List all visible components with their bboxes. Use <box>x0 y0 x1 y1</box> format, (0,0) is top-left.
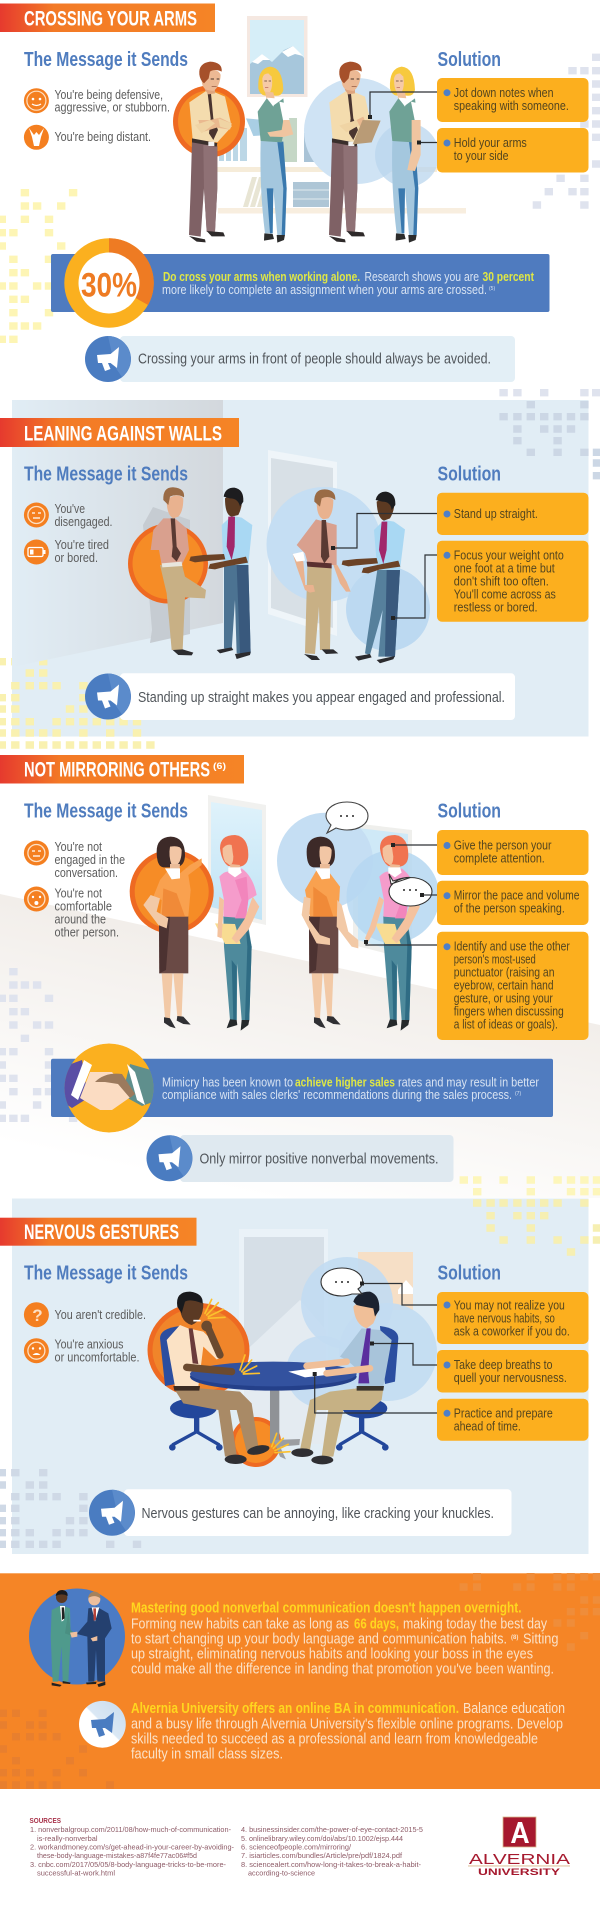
closing paragraph 2: Balance education <box>463 1700 565 1717</box>
closing paragraph 2: faculty in small class sizes. <box>131 1746 283 1763</box>
logo: Alvernia University <box>468 1817 570 1877</box>
solution box: attention <box>437 830 588 875</box>
banner heading <box>0 1218 196 1246</box>
banner heading: LEANING AGAINST WALLS <box>24 423 222 446</box>
banner heading <box>0 755 244 784</box>
arms and paper <box>187 1321 370 1377</box>
callout: mimicry: compliance with sales clerks' recommendations during the sales process. <box>162 1088 512 1102</box>
sources column 2 <box>241 1825 423 1878</box>
takeaway bar <box>89 1489 512 1536</box>
message: distant <box>24 125 151 150</box>
connector lines <box>331 514 437 620</box>
solution box: punctuator: Identify and use the other <box>454 940 570 954</box>
stat callout: 30 percent: (5) <box>489 286 495 292</box>
section: nervous gestures <box>0 1198 600 1554</box>
figures: corrected conversation <box>302 835 420 1031</box>
left chair <box>160 1326 223 1451</box>
banner heading: NERVOUS GESTURES <box>24 1221 179 1244</box>
closing paragraph 1: making today the best day <box>403 1615 547 1632</box>
sources column 1: 1. nonverbalgroup.com/2011/08/how-much-of-communication- <box>30 1825 231 1834</box>
wall shadow <box>143 507 190 643</box>
solution box: ask coworker: ask a coworker if you do. <box>454 1324 570 1338</box>
takeaway bar <box>146 1135 454 1182</box>
solution box: practice <box>437 1399 588 1441</box>
message: not engaged <box>24 840 125 880</box>
solution box: mirror pace <box>437 881 588 925</box>
straight standing man <box>293 489 351 660</box>
sources column 2: 4. businessinsider.com/the-power-of-eye-contact-2015-5 <box>241 1825 423 1834</box>
solution box: stand straight <box>437 493 588 535</box>
speech bubble: woman <box>326 802 368 833</box>
message: anxious: or uncomfortable. <box>54 1351 140 1365</box>
window with mountains <box>247 16 308 97</box>
speech bubble: colleague <box>389 874 432 906</box>
sources column 1: successful-at-work.html <box>37 1868 115 1878</box>
figures: corrected posture <box>293 489 405 663</box>
solution box: attention: Give the person your <box>454 839 552 853</box>
floor <box>0 894 600 1198</box>
solution box: notes: speaking with someone. <box>454 99 569 113</box>
message: distant: You're being distant. <box>54 130 151 144</box>
banner heading: CROSSING YOUR ARMS <box>24 8 197 30</box>
table stand <box>270 1388 300 1459</box>
solution box: notes <box>437 78 588 122</box>
dark-skinned colleague <box>189 488 252 659</box>
orange circle behind woman <box>130 850 214 934</box>
message: not comfortable <box>24 886 119 940</box>
donut chart: 30%: 30% <box>81 266 137 304</box>
message: disengaged: You've <box>54 502 85 516</box>
message: not credible <box>24 1302 146 1327</box>
table <box>190 1362 357 1391</box>
solution box: punctuator: eyebrow, certain hand <box>454 978 554 992</box>
heading: the message it sends: The Message it Sends <box>24 801 188 823</box>
sources column 2: 7. isiarticles.com/bundles/Article/pre/pdf/1824.pdf <box>241 1851 403 1860</box>
solution box: notes: Jot down notes when <box>454 86 554 100</box>
blue highlight circles <box>286 1257 437 1408</box>
heading: solution: Solution <box>438 801 501 823</box>
solution box: focus weight: one foot at a time but <box>454 561 555 575</box>
solution box: ask coworker: You may not realize you <box>454 1298 565 1312</box>
orange circles behind figure <box>148 1303 281 1467</box>
message: not comfortable: You're not <box>54 886 102 900</box>
solution box: focus weight: You'll come across as <box>454 587 556 601</box>
solution box: ask coworker: have nervous habits, so <box>454 1312 555 1326</box>
closing paragraph 2 <box>131 1700 565 1763</box>
heading: solution: Solution <box>438 464 501 486</box>
figures: woman with raised arm and colleague <box>143 835 259 1031</box>
wall <box>12 400 223 667</box>
closing paragraph 1: up straight, eliminating nervous habits and looking your boss in the eyes <box>131 1645 533 1662</box>
leaning man <box>151 487 206 655</box>
section: leaning against walls <box>0 400 600 745</box>
takeaway bar: Only mirror positive nonverbal movements. <box>200 1150 438 1167</box>
closing paragraph 1: to start changing up your body language and communication habits. <box>131 1630 507 1647</box>
left man <box>167 1292 270 1464</box>
heading: the message it sends: The Message it Sends <box>24 464 188 486</box>
message: not engaged: You're not <box>54 840 102 854</box>
right man <box>291 1292 392 1464</box>
connector lines <box>313 1282 437 1413</box>
right chair <box>336 1326 398 1451</box>
heading: solution: Solution <box>438 1263 501 1285</box>
stat callout: 30 percent: more likely to complete an assignment when your arms are crossed. <box>162 283 487 297</box>
solution box: punctuator: a list of ideas or goals). <box>454 1017 558 1031</box>
solution box: punctuator: gesture, or using your <box>454 992 553 1006</box>
closing paragraph 1: Forming new habits can take as long as <box>131 1615 349 1632</box>
orange circle behind crossed arms <box>173 86 245 158</box>
callout: mimicry: rates and may result in better <box>398 1075 539 1089</box>
figures: arms crossed man and woman <box>189 62 293 243</box>
sources column 1: is-really-nonverbal <box>37 1834 98 1843</box>
callout: mimicry: Mimicry has been known to <box>162 1075 293 1089</box>
takeaway bar <box>85 673 515 720</box>
sources: SOURCES <box>30 1816 61 1825</box>
solution box: deep breaths <box>437 1350 588 1392</box>
takeaway bar: Crossing your arms in front of people should always be avoided. <box>138 350 491 368</box>
takeaway bar: Nervous gestures can be annoying, like cracking your knuckles. <box>142 1505 494 1522</box>
icon: handshake <box>60 1044 158 1132</box>
heading: solution: Solution <box>438 49 501 71</box>
logo: Alvernia University: ALVERNIA <box>469 1851 570 1868</box>
message: anxious <box>24 1338 140 1365</box>
colleague with fixed posture <box>342 492 405 663</box>
solution box: punctuator: fingers when discussing <box>454 1005 564 1019</box>
windows <box>208 795 412 960</box>
message: not credible: ? <box>32 1306 43 1325</box>
solution box: deep breaths: quell your nervousness. <box>454 1371 567 1385</box>
sources column 2: 6. scienceofpeople.com/mirroring/ <box>241 1842 352 1852</box>
solution box: stand straight: Stand up straight. <box>454 507 538 521</box>
takeaway bar <box>85 336 515 382</box>
banner heading: (6) <box>213 761 226 771</box>
blue highlight circles <box>266 487 430 651</box>
solution box: focus weight: restless or bored. <box>454 600 538 614</box>
shelves and office objects <box>192 118 466 214</box>
connector lines <box>368 92 437 144</box>
message: tired: You're tired <box>54 538 109 552</box>
sources column 1: 3. cnbc.com/2017/05/05/8-body-language-tricks-to-be-more- <box>30 1860 226 1869</box>
solution box: deep breaths: Take deep breaths to <box>454 1358 553 1372</box>
stat callout: 30 percent: Do cross your arms when working alone. <box>163 270 360 284</box>
window with mountains <box>239 1229 413 1444</box>
solution box: focus weight <box>437 541 588 622</box>
section: not mirroring others <box>0 755 600 1198</box>
banner heading <box>0 418 239 447</box>
sources column 2: according-to-science <box>248 1868 315 1878</box>
message: not engaged: engaged in the <box>54 853 125 867</box>
figures: corrected man and woman <box>329 62 421 243</box>
sources column 1 <box>30 1825 234 1878</box>
orange circle behind leaning man <box>128 524 208 604</box>
solution box: arms to side: Hold your arms <box>454 136 527 150</box>
sources column 1: these-body-language-mistakes-a87f4fe77ac06#f5d <box>37 1851 197 1860</box>
message: defensive: You're being defensive, <box>54 88 163 102</box>
figures: leaning man and colleague <box>151 487 252 659</box>
closing paragraph 1: (8) <box>511 1635 518 1641</box>
closing paragraph 1 <box>131 1600 558 1677</box>
section: crossing your arms <box>0 4 600 393</box>
callout: mimicry <box>51 1044 553 1132</box>
solution box: arms to side <box>437 128 588 172</box>
callout: mimicry: achieve higher sales <box>295 1075 395 1089</box>
blue highlight circles <box>304 78 439 187</box>
sources column 1: 2. workandmoney.com/s/get-ahead-in-your-career-by-avoiding- <box>30 1842 234 1852</box>
solution box: ask coworker <box>437 1292 588 1344</box>
man in navy suit <box>70 1592 112 1687</box>
doorway <box>268 450 337 636</box>
icon: megaphone <box>79 1701 126 1748</box>
closing paragraph 1: Sitting <box>523 1630 558 1647</box>
figures: seated at table <box>160 1292 398 1464</box>
solution box: arms to side: to your side <box>454 149 509 163</box>
solution box: mirror pace: of the person speaking. <box>454 902 565 916</box>
sources <box>30 1816 423 1878</box>
connector lines <box>364 843 437 945</box>
message: anxious: You're anxious <box>54 1338 124 1352</box>
sources column 2: 5. onlinelibrary.wiley.com/doi/abs/10.1002/ejsp.444 <box>241 1834 403 1843</box>
banner heading: NOT MIRRORING OTHERS <box>24 759 210 782</box>
stat callout: 30 percent: Research shows you are <box>364 270 479 284</box>
message: not comfortable: comfortable <box>54 900 112 914</box>
solution box: focus weight: Focus your weight onto <box>454 549 564 563</box>
message: defensive: aggressive, or stubborn. <box>54 100 170 114</box>
sources column 2: 8. sciencealert.com/how-long-it-takes-to-break-a-habit- <box>241 1860 421 1869</box>
message: disengaged <box>24 502 112 529</box>
logo: Alvernia University: UNIVERSITY <box>478 1867 560 1877</box>
closing paragraph 1: 66 days, <box>354 1615 399 1632</box>
nervous gesture bursts <box>205 1299 290 1453</box>
message: not engaged: conversation. <box>54 866 118 880</box>
banner heading <box>0 4 215 32</box>
heading: the message it sends: The Message it Sends <box>24 49 188 71</box>
solution box: punctuator: person's most-used <box>454 953 536 967</box>
closing paragraph 2: Alvernia University offers an online BA in communication. <box>131 1700 459 1717</box>
message: defensive <box>24 88 170 114</box>
blue highlight circles <box>277 813 440 943</box>
stat callout: 30 percent: 30 percent <box>482 270 535 284</box>
stat callout: 30 percent <box>51 238 550 328</box>
handshake illustration <box>29 1588 125 1687</box>
solution box: punctuator <box>437 932 588 1040</box>
solution box: focus weight: don't shift too often. <box>454 574 549 588</box>
man in green suit <box>51 1590 76 1687</box>
speech bubble <box>321 1268 363 1296</box>
solution box: punctuator: punctuator (raising an <box>454 966 555 980</box>
message: not comfortable: around the <box>54 912 106 926</box>
message: tired: or bored. <box>54 551 98 565</box>
donut chart: 30% <box>64 238 154 328</box>
message: not comfortable: other person. <box>54 926 119 940</box>
callout: mimicry: (7) <box>515 1091 521 1097</box>
takeaway bar: Standing up straight makes you appear engaged and professional. <box>138 689 505 706</box>
solution box: practice: ahead of time. <box>454 1419 521 1433</box>
message: disengaged: disengaged. <box>54 515 112 529</box>
message: tired <box>24 538 109 565</box>
heading: the message it sends: The Message it Sends <box>24 1263 188 1285</box>
solution box: attention: complete attention. <box>454 852 545 866</box>
orange closing panel <box>0 1573 600 1789</box>
message: not credible: You aren't credible. <box>54 1308 146 1322</box>
solution box: practice: Practice and prepare <box>454 1406 553 1420</box>
